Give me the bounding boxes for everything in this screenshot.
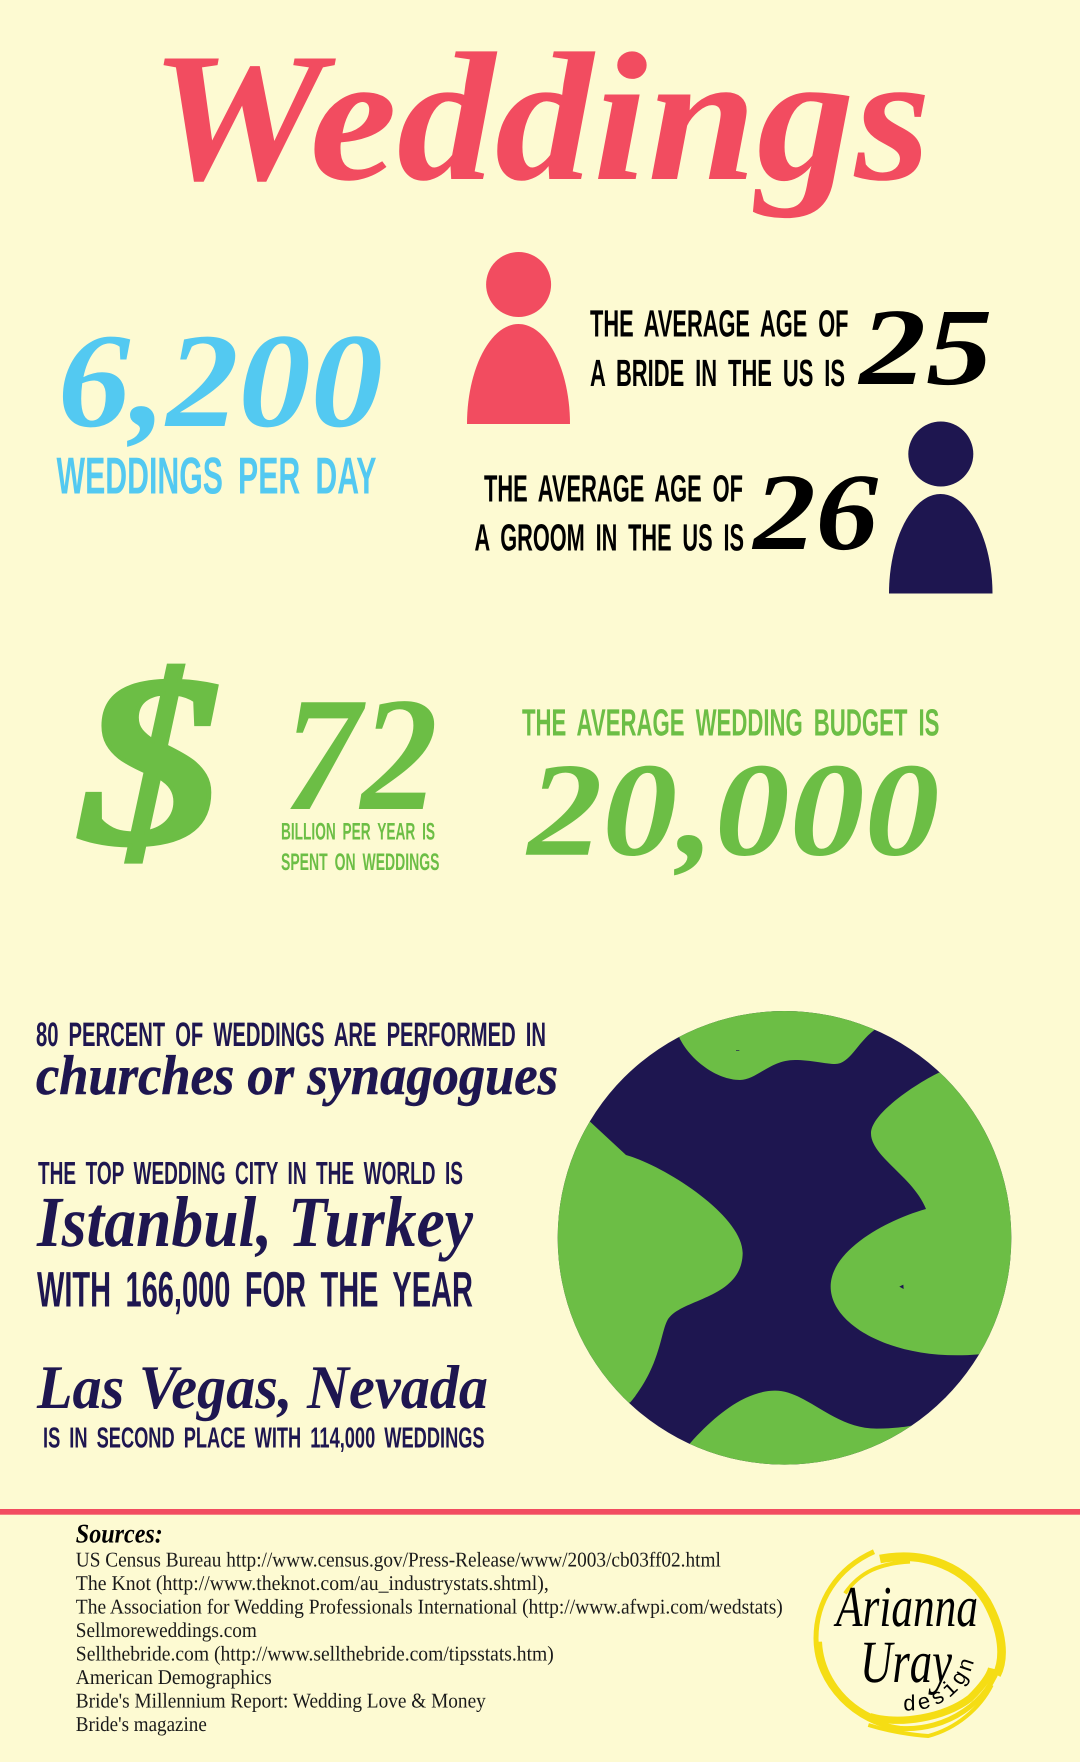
script: Las Vegas, Nevada: Las Vegas, Nevada	[36, 1354, 488, 1422]
divider line	[0, 1509, 1080, 1515]
text: Uray: Uray	[860, 1629, 952, 1695]
logo: Arianna Uray design	[814, 1549, 1006, 1738]
title: Weddings	[150, 15, 931, 219]
text: spent on weddings: SPENT ON WEDDINGS	[281, 849, 439, 876]
text block: source list: Sellmoreweddings.com	[76, 1618, 257, 1642]
icon: bride	[467, 252, 570, 424]
number: 20,000: 20,000	[525, 736, 940, 884]
icon: groom	[889, 422, 992, 594]
text: 80 percent: 80 PERCENT OF WEDDINGS ARE PERFORMED IN	[36, 1016, 546, 1054]
text: design: design	[904, 1660, 974, 1711]
text: billion per year: BILLION PER YEAR IS	[281, 818, 435, 846]
text block: source list	[76, 1548, 783, 1736]
icon: dollar sign: $	[79, 625, 222, 896]
text block: source list: US Census Bureau http://www.census.gov/Press-Release/www/2003/cb03ff02.html	[76, 1548, 721, 1572]
panel: groom age	[474, 422, 992, 594]
panel: weddings per day	[56, 307, 383, 506]
text: second place: IS IN SECOND PLACE WITH 114,000 WEDDINGS	[43, 1423, 485, 1455]
text block: source list: Sellthebride.com (http://www.sellthebride.com/tipsstats.htm)	[76, 1642, 554, 1666]
panel: sources	[76, 1519, 783, 1736]
label: weddings per day: WEDDINGS PER DAY	[56, 448, 376, 506]
text: groom age line 2: A GROOM IN THE US IS	[474, 517, 744, 559]
text: top wedding city: THE TOP WEDDING CITY IN THE WORLD IS	[38, 1155, 463, 1191]
script: Istanbul, Turkey: Istanbul, Turkey	[36, 1182, 474, 1262]
number: 72: 72	[284, 665, 438, 845]
text block: source list: Bride's magazine	[76, 1712, 207, 1736]
panel: locations text	[36, 1016, 558, 1455]
panel: money	[79, 625, 940, 896]
number: 26: 26	[751, 451, 878, 573]
text: 166,000: WITH 166,000 FOR THE YEAR	[37, 1262, 473, 1318]
icon: yellow brush ring	[816, 1552, 1002, 1736]
text block: source list: The Knot (http://www.theknot.com/au_industrystats.shtml),	[76, 1571, 549, 1595]
text block: source list: The Association for Wedding Professionals International (http://www.afwpi.com/wedstats)	[76, 1594, 783, 1618]
heading: sources: Sources:	[76, 1519, 163, 1549]
text: bride age line 2: A BRIDE IN THE US IS	[590, 353, 845, 395]
text: groom age line 1: THE AVERAGE AGE OF	[484, 468, 743, 510]
text block: source list: Bride's Millennium Report: Wedding Love & Money	[76, 1688, 486, 1712]
big number: 6,200: 6,200	[58, 307, 383, 456]
icon: globe	[558, 1011, 1012, 1465]
text: bride age line 1: THE AVERAGE AGE OF	[590, 304, 848, 346]
text: Arianna: Arianna	[833, 1574, 978, 1639]
number: 25: 25	[857, 286, 992, 408]
script: churches or synagogues: churches or synagogues	[36, 1045, 558, 1107]
panel: bride age	[467, 252, 992, 424]
text block: source list: American Demographics	[76, 1665, 272, 1689]
